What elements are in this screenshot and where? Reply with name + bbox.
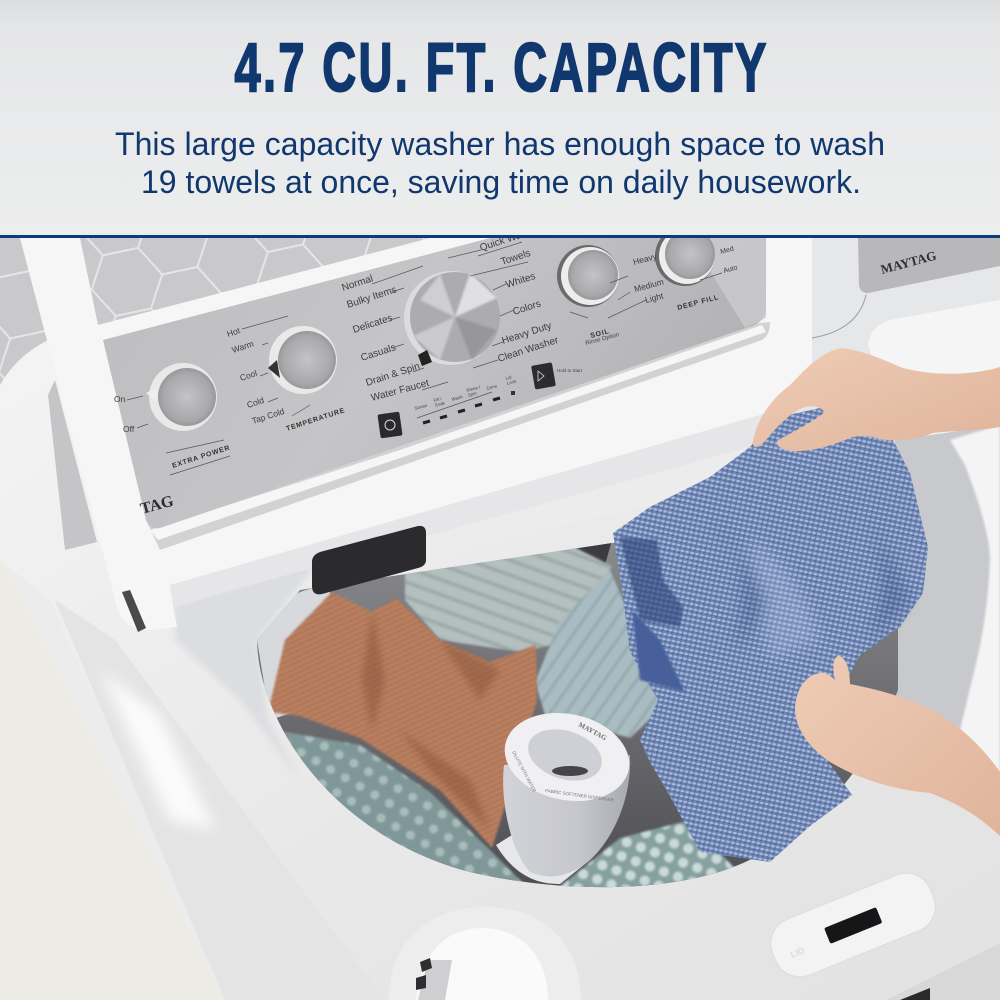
towel: teal dots left	[275, 730, 525, 885]
tiles visible through lid	[80, 238, 430, 325]
status lights: Done	[486, 383, 498, 391]
label leader lines	[127, 242, 722, 475]
knob: deep fill	[655, 226, 715, 286]
header band	[0, 0, 1000, 238]
panel labels: Cool	[239, 368, 258, 383]
lid lock plate	[763, 865, 943, 985]
towel: orange corduroy	[268, 592, 537, 848]
status lights: Rinse /	[466, 385, 481, 393]
panel labels: On	[114, 394, 126, 404]
panel labels: Normal	[341, 273, 375, 294]
panel labels: Light	[644, 290, 665, 305]
panel labels: Rinse Option	[585, 332, 620, 347]
blue knit towel	[613, 405, 928, 862]
subtitle	[115, 126, 885, 200]
panel labels: Colors	[512, 298, 542, 318]
power button	[377, 412, 403, 438]
knob: temperature	[268, 326, 337, 394]
panel labels: TEMPERATURE	[285, 407, 346, 433]
softener dispenser	[496, 713, 630, 884]
upper hand	[753, 348, 1000, 451]
start button: Hold to Start	[557, 368, 583, 373]
title: 4.7 CU. FT. CAPACITY	[234, 29, 766, 106]
towel fold shadows	[620, 500, 910, 692]
tub opening	[257, 542, 898, 888]
panel labels: Off	[123, 424, 135, 434]
panel labels: Towels	[500, 248, 532, 268]
lid side shading	[48, 380, 97, 550]
panel labels	[114, 227, 739, 470]
panel labels: EXTRA POWER	[171, 445, 231, 470]
panel labels: Hot	[226, 325, 242, 339]
panel labels: Casuals	[360, 342, 397, 364]
panel labels: Quick Wash	[479, 227, 533, 254]
knob: soil	[557, 245, 619, 307]
status lights: Lid	[505, 375, 512, 381]
towel: pale ribbed	[405, 536, 612, 652]
panel labels: DEEP FILL	[677, 294, 720, 312]
softener opening	[389, 907, 581, 1000]
towel: teal ribbed	[535, 570, 665, 738]
lid lock plate: LID	[789, 945, 807, 960]
lid lower face shading	[170, 400, 812, 606]
softener dispenser: FABRIC SOFTENER DISPENSER	[545, 788, 615, 803]
perforated basket	[570, 543, 612, 564]
background wall tiles	[0, 238, 1000, 1000]
front panel edge	[886, 943, 1000, 1000]
status lights: Soak	[434, 400, 446, 408]
drum lip	[257, 585, 330, 720]
status lights: Wash	[451, 394, 464, 402]
control panel	[103, 226, 770, 550]
deck crease and highlight	[55, 600, 385, 1000]
status lights	[414, 373, 517, 423]
lower hand	[795, 656, 1000, 836]
orange fold shadows	[362, 612, 500, 830]
panel labels: Med	[720, 246, 735, 256]
logo: TAG	[139, 493, 176, 518]
towel: teal dots right	[558, 820, 738, 892]
deck grey inner band	[173, 560, 320, 780]
neighbouring washer: MAYTAG	[879, 248, 938, 277]
panel labels: SOIL	[590, 328, 610, 340]
panel labels: Warm	[231, 338, 255, 355]
header rule	[0, 235, 1000, 238]
subtitle: This large capacity washer has enough space to wash	[115, 126, 885, 162]
panel labels: Delicates	[352, 313, 394, 336]
knob: cycle	[404, 271, 500, 366]
counter surface	[0, 558, 225, 1000]
panel labels: Cold	[246, 395, 266, 410]
softener dispenser: DILUTE WITH WATER	[511, 750, 537, 794]
inner tub wall shading right	[895, 425, 1000, 775]
neighbouring washer	[810, 238, 1000, 538]
panel labels: Tap Cold	[251, 406, 286, 426]
start button	[531, 362, 583, 390]
panel labels: Heavy Duty	[501, 320, 553, 347]
status lights: Lock	[506, 378, 517, 386]
dark vent	[900, 988, 930, 1000]
panel labels: Whites	[505, 271, 537, 291]
softener dispenser: MAYTAG	[577, 721, 608, 742]
panel labels: Bulky Items	[346, 284, 398, 311]
status lights: Spin	[467, 391, 478, 398]
panel labels: Heavy	[632, 251, 659, 267]
status lights: Fill /	[433, 396, 442, 403]
lid bumper	[312, 526, 426, 594]
subtitle: 19 towels at once, saving time on daily housework.	[141, 164, 861, 200]
panel labels: Drain & Spin	[365, 361, 421, 389]
lid frame	[20, 238, 812, 630]
status lights: Sense	[414, 403, 428, 411]
washer top deck	[0, 335, 1000, 1000]
panel labels: Clean Washer	[497, 335, 560, 365]
panel labels: Medium	[633, 276, 665, 294]
knob: extra power	[146, 363, 217, 431]
panel labels: Water Faucet	[370, 378, 431, 404]
panel labels: Auto	[723, 264, 739, 275]
hinge	[122, 590, 146, 632]
